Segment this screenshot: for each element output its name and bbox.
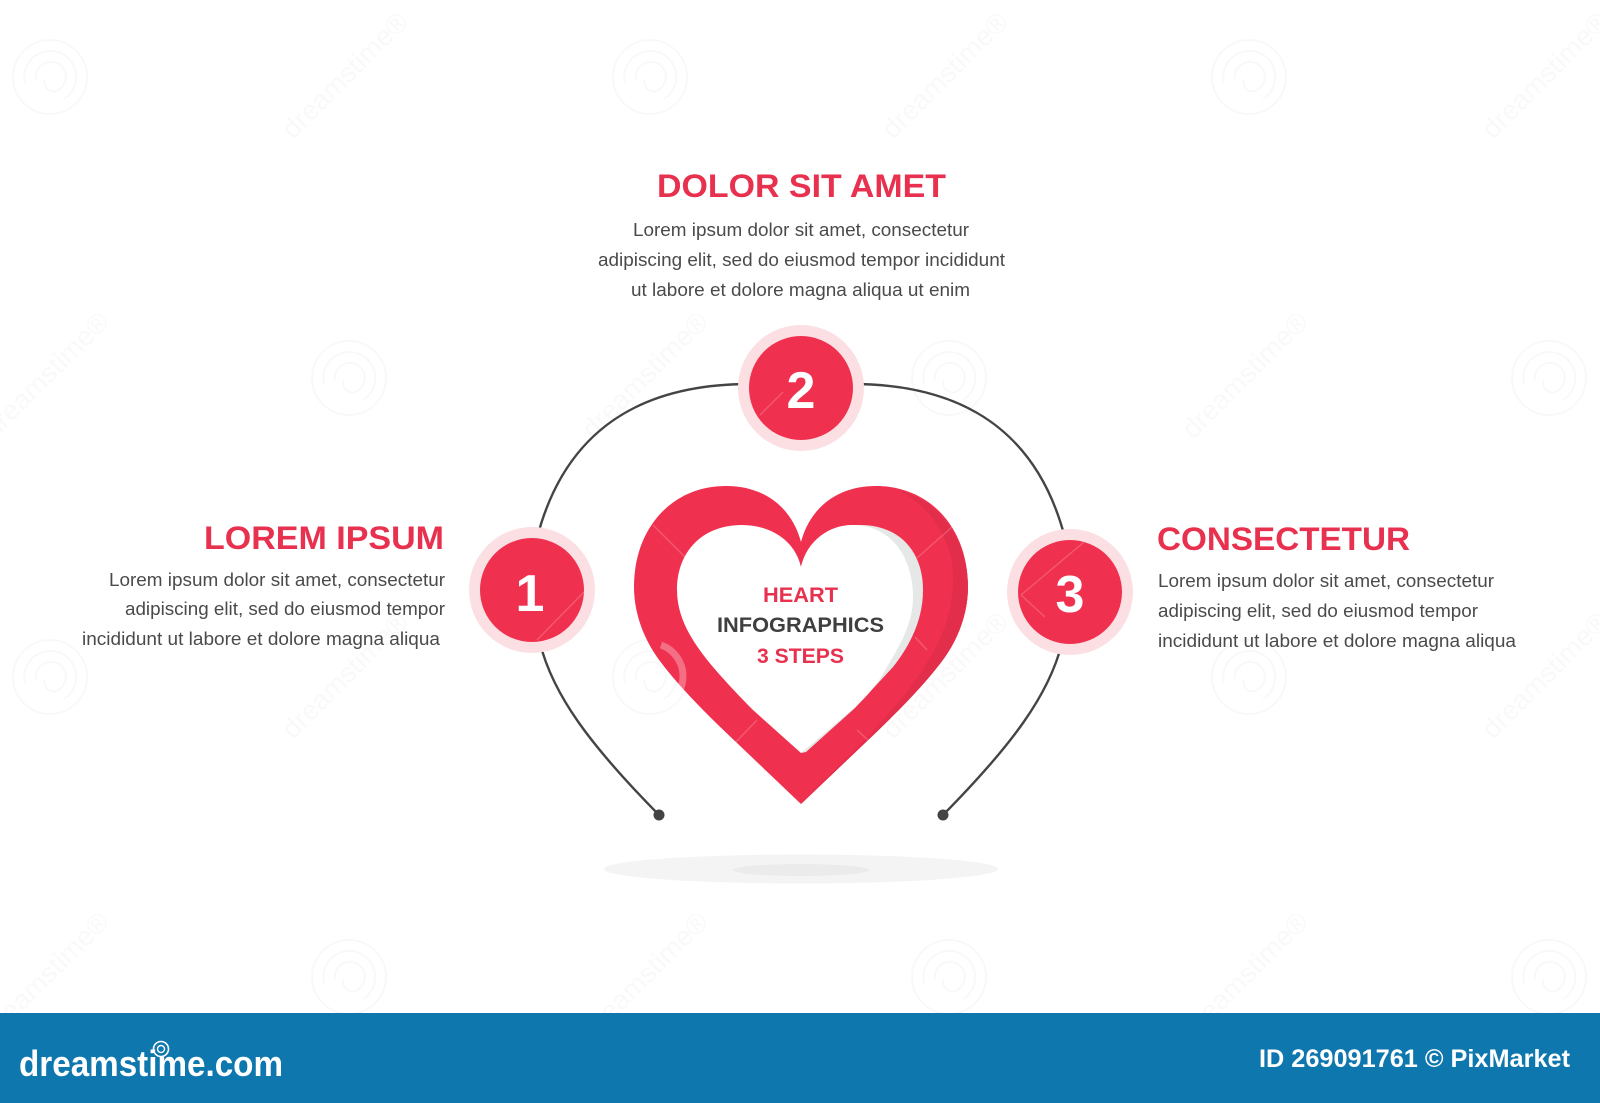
footer logo: dreamstime.com bbox=[19, 1043, 283, 1084]
heart center text: 3 STEPS bbox=[757, 645, 844, 668]
heart ground shadow bbox=[604, 854, 998, 884]
step 1 text block: LOREM IPSUM bbox=[204, 520, 444, 556]
heart outer shape bbox=[634, 486, 968, 804]
heart inner gray edge bbox=[801, 525, 923, 753]
step 1 text block: Lorem ipsum dolor sit amet, consectetur bbox=[109, 570, 445, 590]
step 2 text block: ut labore et dolore magna aliqua ut enim bbox=[631, 280, 970, 300]
step 1 text block: adipiscing elit, sed do eiusmod tempor bbox=[125, 599, 445, 619]
step 2 text block bbox=[598, 168, 1005, 300]
watermark pattern: dreamstime® bbox=[1176, 906, 1314, 1044]
heart center text: INFOGRAPHICS bbox=[717, 614, 884, 637]
step 2 text block: DOLOR SIT AMET bbox=[657, 168, 946, 204]
step 1 text block: incididunt ut labore et dolore magna aliqua bbox=[82, 629, 441, 649]
watermark pattern: dreamstime® bbox=[276, 606, 414, 744]
footer image id: ID 269091761 © PixMarket bbox=[1259, 1045, 1571, 1073]
step 1 circle: 1 bbox=[516, 565, 544, 623]
watermark pattern: dreamstime® bbox=[276, 6, 414, 144]
connector arcs bbox=[537, 384, 1065, 820]
watermark pattern: dreamstime® bbox=[876, 6, 1014, 144]
step 3 text block: adipiscing elit, sed do eiusmod tempor bbox=[1158, 601, 1478, 621]
step 1 circle bbox=[469, 527, 595, 653]
step 2 circle: 2 bbox=[787, 362, 815, 420]
step 2 circle bbox=[738, 325, 864, 451]
heart dark side bbox=[801, 490, 968, 804]
step 3 text block: CONSECTETUR bbox=[1157, 521, 1410, 557]
step 2 text block: Lorem ipsum dolor sit amet, consectetur bbox=[633, 220, 969, 240]
step 3 text block bbox=[1157, 521, 1517, 651]
footer banner bbox=[0, 1013, 1600, 1103]
heart center text: HEART bbox=[763, 584, 838, 607]
step 1 text block bbox=[82, 520, 445, 649]
heart center text bbox=[717, 584, 884, 668]
step 3 circle: 3 bbox=[1056, 566, 1084, 624]
watermark pattern: dreamstime® bbox=[576, 906, 714, 1044]
watermark pattern: dreamstime® bbox=[576, 306, 714, 444]
heart inner white bbox=[677, 525, 913, 753]
step 3 text block: incididunt ut labore et dolore magna aliqua bbox=[1158, 631, 1517, 651]
watermark pattern: dreamstime® bbox=[876, 606, 1014, 744]
heart bbox=[634, 486, 968, 804]
watermark pattern: dreamstime® bbox=[1176, 306, 1314, 444]
step 3 text block: Lorem ipsum dolor sit amet, consectetur bbox=[1158, 571, 1494, 591]
step 3 circle bbox=[1007, 529, 1133, 655]
step 2 text block: adipiscing elit, sed do eiusmod tempor incididunt bbox=[598, 250, 1005, 270]
